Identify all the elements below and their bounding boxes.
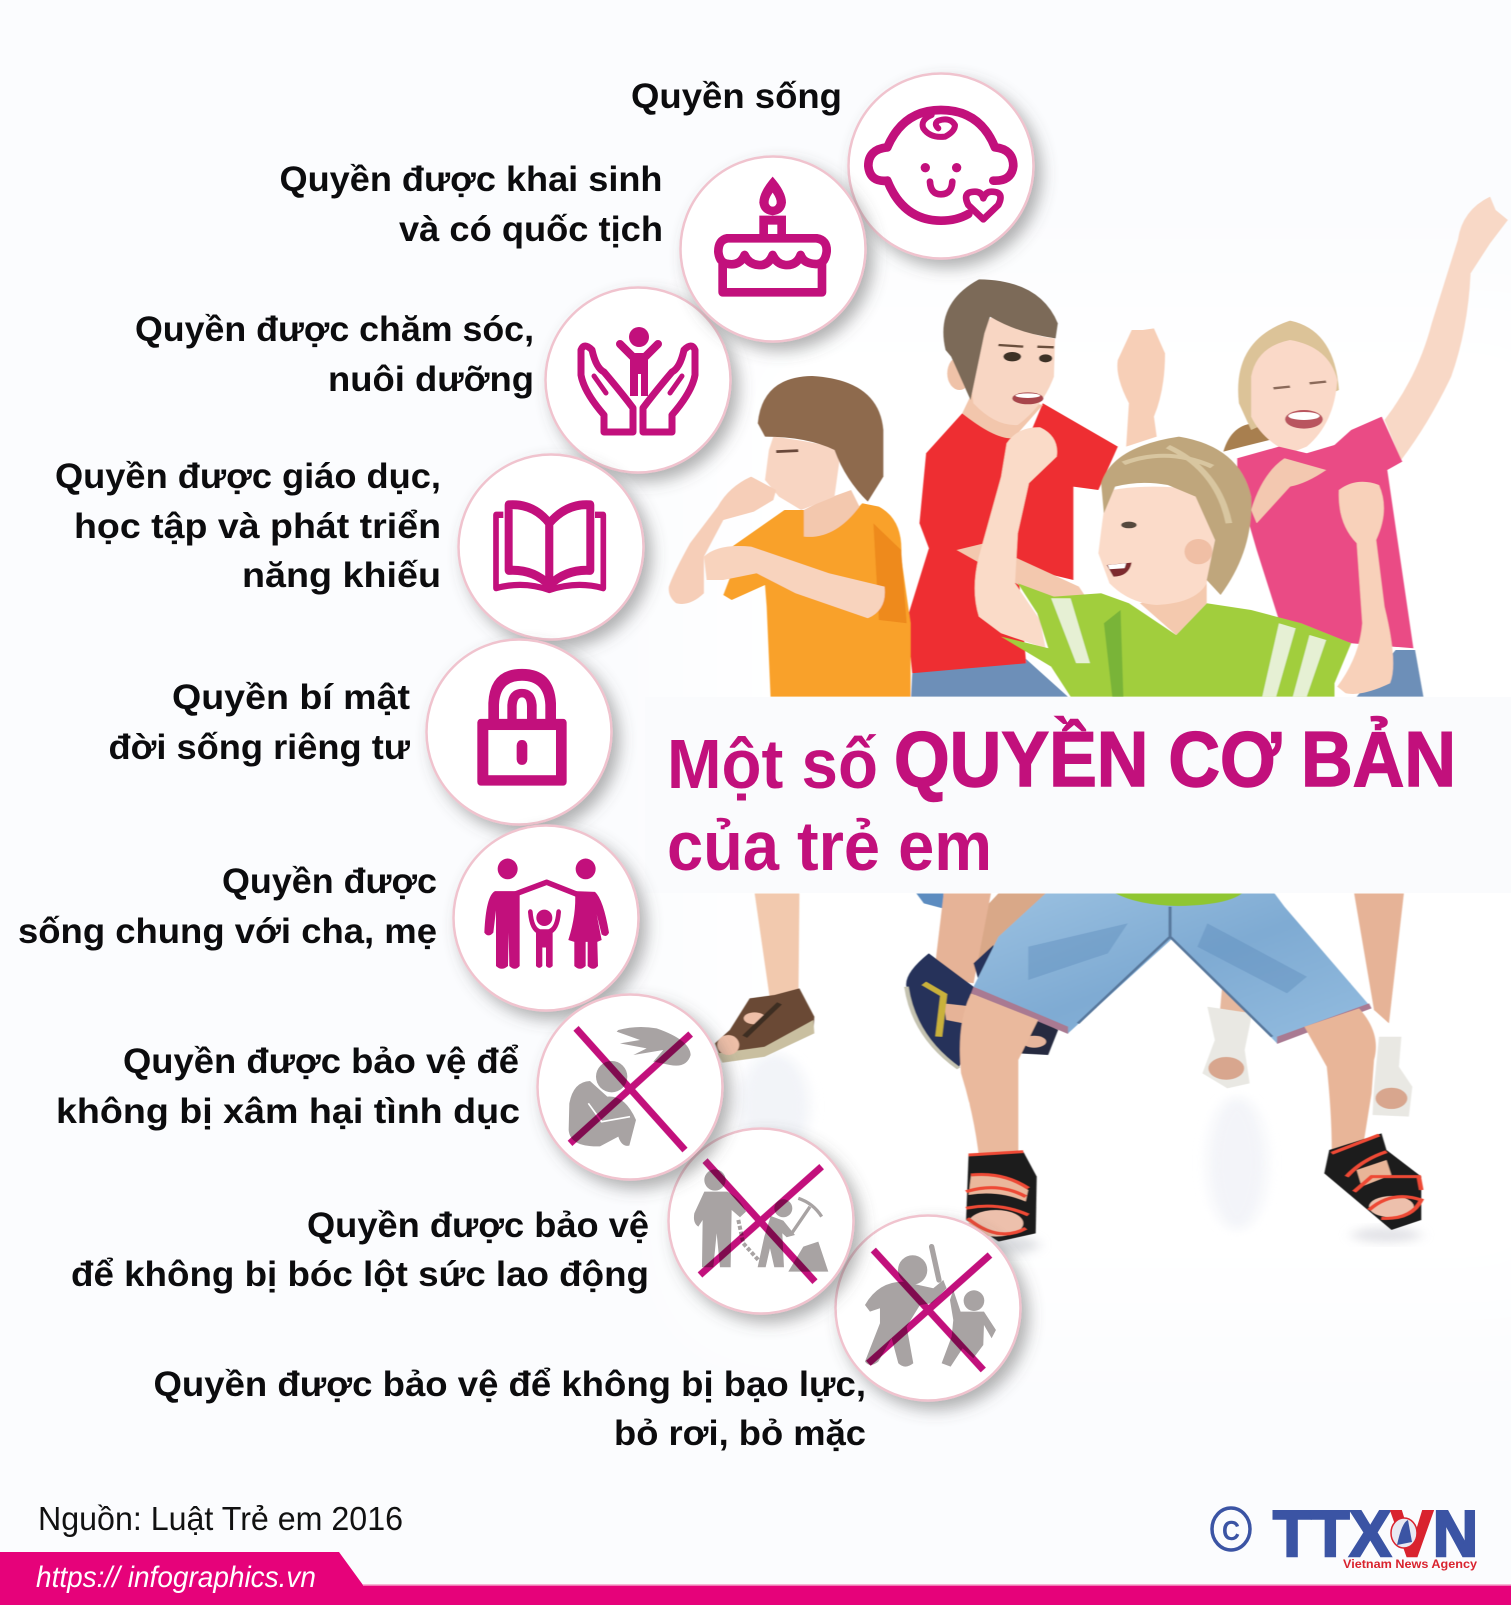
label: privacy — [108, 678, 411, 767]
icon circle: family — [454, 826, 638, 1010]
label: protection from sexual abuse — [56, 1042, 520, 1131]
label: care and nurture: Quyền được chăm sóc, — [135, 310, 534, 349]
label: protection from labour exploitation: Quyền được bảo vệ — [307, 1206, 649, 1245]
title — [667, 715, 1456, 885]
boy in orange shirt — [669, 376, 911, 697]
label: privacy: Quyền bí mật — [172, 678, 410, 717]
label: care and nurture — [135, 310, 534, 399]
label: birth registration and nationality: và có quốc tịch — [399, 210, 663, 249]
back legs and navy sandal — [906, 893, 1058, 1068]
label: education: Quyền được giáo dục, — [55, 457, 441, 496]
label: protection from violence and neglect: Quyền được bảo vệ để không bị bạo lực, — [154, 1365, 866, 1404]
icon circle: baby face — [848, 74, 1034, 258]
icon circle: open book — [458, 454, 644, 640]
label: protection from sexual abuse: Quyền được bảo vệ để — [123, 1042, 519, 1081]
boy in green shirt — [957, 427, 1393, 697]
back-right legs and white sandals — [1202, 893, 1412, 1117]
floor reflections — [740, 1053, 1421, 1255]
title: QUYỀN CƠ BẢN — [894, 715, 1456, 803]
title: của trẻ em — [667, 807, 992, 885]
label: privacy: đời sống riêng tư — [108, 728, 411, 767]
label: Quyền sống: Quyền sống — [631, 77, 842, 116]
boy in green: denim shorts — [971, 893, 1372, 1044]
label: education: học tập và phát triển — [74, 507, 441, 546]
girl in pink shirt — [1223, 197, 1508, 697]
label: birth registration and nationality: Quyền được khai sinh — [280, 160, 662, 199]
icon circle: no child labour — [668, 1128, 854, 1314]
boy in red shirt — [907, 279, 1165, 697]
title: Một số — [667, 725, 878, 803]
icon circle: hands holding child — [546, 288, 730, 472]
boy in green: legs — [960, 993, 1376, 1153]
boy in orange: leg and brown sandal — [715, 893, 814, 1063]
photo: children legs and sandals — [715, 893, 1421, 1255]
logo: TTXVN: TTXVN — [1273, 1497, 1478, 1570]
logo: TTXVN: C — [1222, 1515, 1240, 1546]
label: education — [55, 457, 441, 595]
label: living with parents: sống chung với cha, mẹ — [18, 912, 437, 951]
footer bar with url tab — [0, 1552, 1511, 1605]
source note: Nguồn: Luật Trẻ em 2016 — [38, 1500, 403, 1537]
label: protection from labour exploitation: để không bị bóc lột sức lao động — [71, 1255, 649, 1294]
icon circle: no violence — [836, 1216, 1020, 1400]
boy in green: black sandals — [966, 1133, 1421, 1242]
title band background — [645, 697, 1511, 893]
icon circle: no sexual abuse — [538, 994, 722, 1180]
label: education: năng khiếu — [242, 556, 441, 595]
label: living with parents — [18, 862, 437, 951]
logo: TTXVN: Vietnam News Agency — [1343, 1559, 1478, 1571]
label: living with parents: Quyền được — [222, 862, 437, 901]
label: protection from sexual abuse: không bị xâm hại tình dục — [56, 1092, 520, 1131]
label: protection from violence and neglect: bỏ rơi, bỏ mặc — [614, 1414, 866, 1453]
icon circle: padlock — [426, 640, 612, 824]
footer bar with url tab: https:// infographics.vn — [36, 1561, 316, 1594]
label: birth registration and nationality — [280, 160, 663, 249]
label: care and nurture: nuôi dưỡng — [328, 360, 534, 399]
icon circle: birthday cake — [680, 156, 866, 342]
photo: children upper bodies — [669, 197, 1508, 697]
label: protection from labour exploitation — [71, 1206, 649, 1294]
label: protection from violence and neglect — [154, 1365, 866, 1453]
